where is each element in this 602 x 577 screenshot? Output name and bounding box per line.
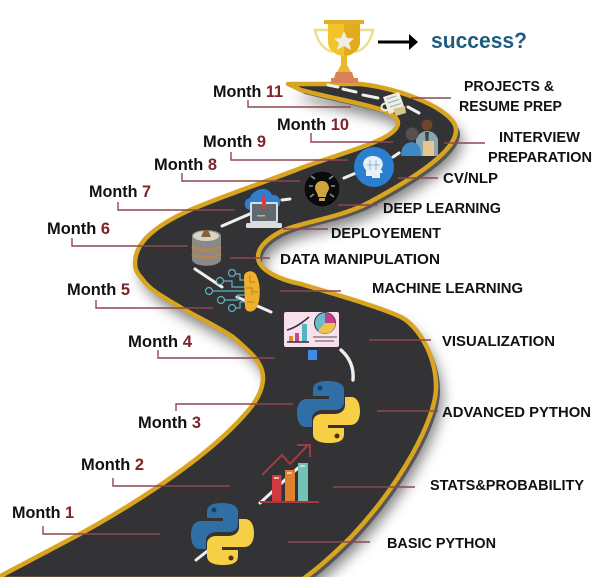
- topic labels: MACHINE LEARNING: [372, 280, 523, 297]
- topic labels: ADVANCED PYTHON: [442, 404, 591, 421]
- month labels: Month 9: [203, 133, 266, 151]
- trophy: [315, 20, 373, 83]
- month labels: Month 1: [12, 504, 74, 522]
- month labels: Month 11: [213, 83, 283, 101]
- icon: cloud laptop deployment: [245, 189, 282, 228]
- icon: projects and resume: [382, 92, 406, 116]
- topic labels: DEPLOYEMENT: [331, 225, 441, 242]
- icon: stats bar chart: [260, 445, 319, 502]
- month labels: Month 7: [89, 183, 151, 201]
- icon: machine learning brain circuit: [206, 270, 260, 312]
- icon: brain circle CV/NLP: [354, 147, 394, 187]
- month labels: Month 8: [154, 156, 217, 174]
- topic labels: PREPARATION: [488, 149, 592, 166]
- month labels: Month 2: [81, 456, 144, 474]
- month labels: Month 6: [47, 220, 110, 238]
- month labels: [12, 83, 349, 522]
- leader lines: [43, 98, 485, 542]
- road centre dashes: [195, 85, 419, 560]
- topic labels: STATS&PROBABILITY: [430, 477, 584, 494]
- topic labels: DEEP LEARNING: [383, 200, 501, 217]
- icon: database: [192, 230, 221, 266]
- icon: deep learning bulb: [304, 171, 340, 207]
- icon: interview people: [401, 120, 438, 156]
- icon: visualization board: [284, 312, 339, 360]
- topic labels: [280, 78, 592, 552]
- topic labels: BASIC PYTHON: [387, 535, 496, 552]
- road: [0, 84, 462, 577]
- arrow: [378, 34, 418, 50]
- icon: python logo advanced: [297, 381, 360, 443]
- topic labels: INTERVIEW: [499, 129, 581, 146]
- month labels: Month 4: [128, 333, 193, 351]
- topic labels: DATA MANIPULATION: [280, 251, 440, 268]
- topic labels: RESUME PREP: [459, 98, 562, 115]
- month labels: Month 5: [67, 281, 130, 299]
- topic labels: CV/NLP: [443, 170, 498, 187]
- heading: success?: success?: [431, 28, 527, 53]
- icon: python logo basic: [191, 503, 254, 565]
- topic labels: VISUALIZATION: [442, 333, 555, 350]
- month labels: Month 10: [277, 116, 349, 134]
- topic labels: PROJECTS &: [464, 78, 554, 95]
- month labels: Month 3: [138, 414, 201, 432]
